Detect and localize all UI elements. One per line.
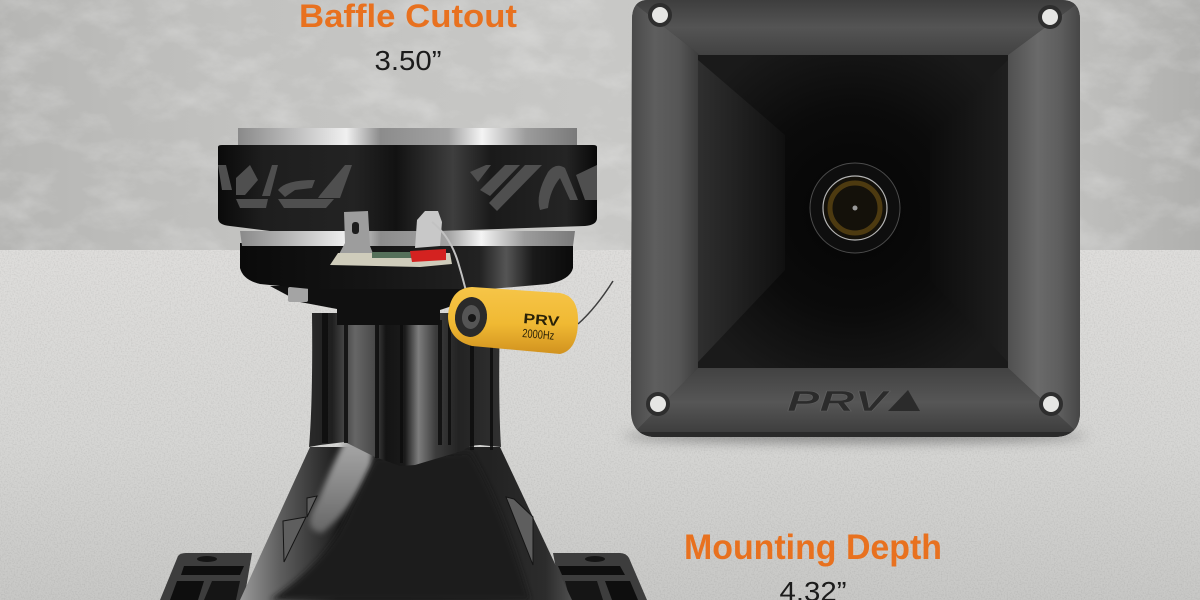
- flare dark cast: [270, 452, 530, 600]
- horn flare: [240, 447, 572, 600]
- front view horn: [630, 0, 1082, 437]
- value: baffle cutout: 3.50”: [374, 45, 442, 76]
- flare glare: [310, 440, 372, 533]
- horn mouth: [698, 55, 1008, 368]
- flare notches: [283, 496, 533, 565]
- corner screw holes: [648, 5, 1061, 414]
- silver top: [238, 128, 577, 145]
- capacitor label: PRV: [523, 310, 561, 329]
- neck rib shadows: [322, 313, 493, 463]
- capacitor rating: 2000Hz: [522, 326, 555, 343]
- terminals: [330, 211, 452, 267]
- capacitor lead wires: [432, 222, 613, 324]
- horn logo mark: [888, 390, 920, 411]
- compression driver throat: [810, 163, 900, 253]
- lower silver ring: [240, 231, 575, 246]
- horn outer frame: [631, 0, 1080, 437]
- neck collar: [270, 286, 470, 325]
- capacitor: [448, 287, 578, 354]
- horn neck: [309, 313, 501, 466]
- small mounting bolt: [288, 287, 308, 302]
- frame bevels: [630, 0, 1082, 437]
- horn mounting flanges: [160, 553, 647, 600]
- ring logo marks: [218, 165, 597, 211]
- concrete wall: [0, 0, 1200, 252]
- mouth left wedge: [698, 60, 785, 362]
- mouth right wedge: [930, 60, 1008, 362]
- concrete floor: [0, 250, 1200, 600]
- contact shadow: [623, 430, 1087, 442]
- side view driver and horn: [160, 128, 647, 600]
- driver base: [240, 243, 573, 289]
- driver ring: [218, 145, 597, 231]
- heading: mounting depth: Mounting Depth: [684, 528, 942, 567]
- horn logo: PRV: [787, 386, 891, 418]
